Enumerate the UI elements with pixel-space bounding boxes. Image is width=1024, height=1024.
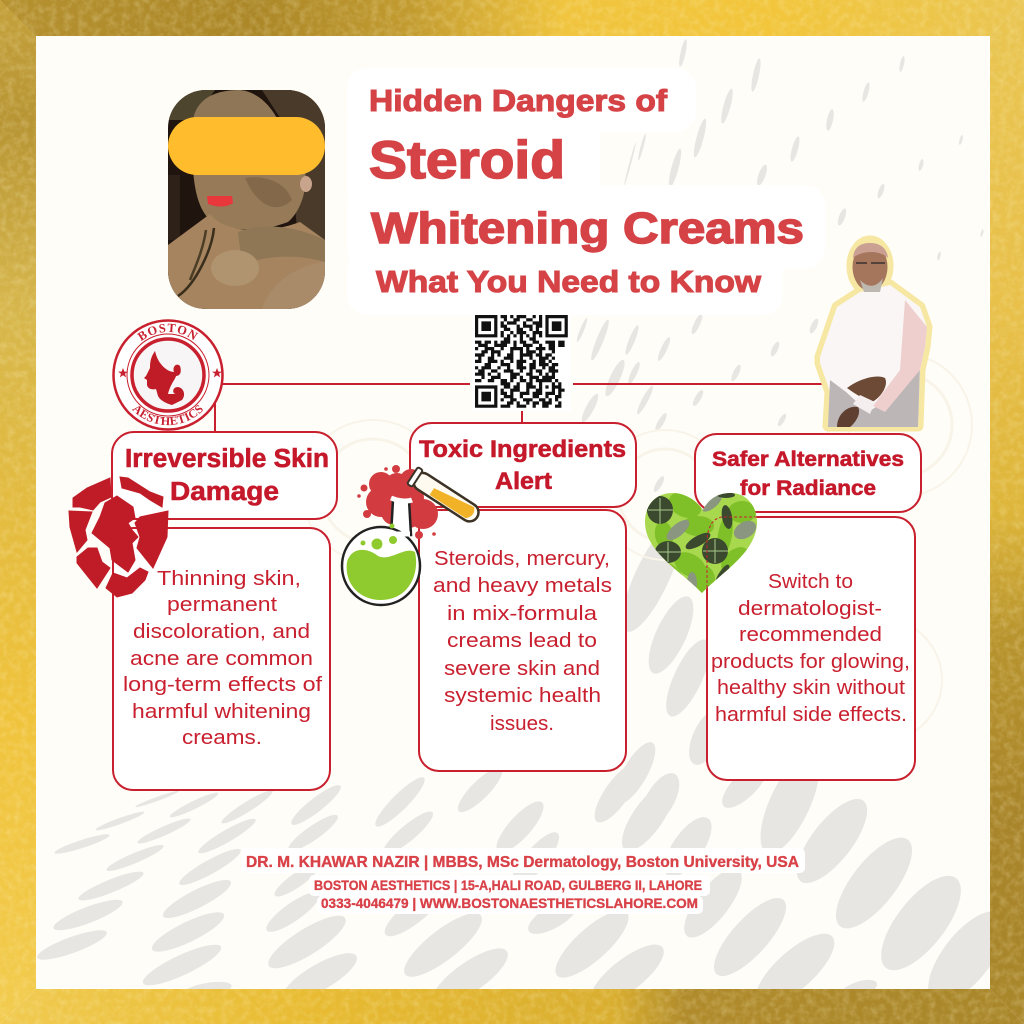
title: Steroid (369, 131, 565, 190)
bubbles (360, 524, 397, 550)
heading text: Safer Alternatives (712, 448, 904, 471)
footer contact details: BOSTON AESTHETICS | 15-A,HALI ROAD, GULBERG II, LAHORE (314, 878, 702, 893)
doctor head (852, 243, 888, 291)
pink sleeve (873, 300, 927, 412)
lower kurta shading (828, 365, 920, 427)
body text: harmful whitening (132, 700, 311, 723)
body text: healthy skin without (717, 676, 905, 699)
QR code (472, 312, 571, 411)
heading text: Alert (495, 468, 552, 495)
logo bottom text: AESTHETICS (132, 404, 203, 426)
body text: harmful side effects. (715, 703, 907, 726)
heading box (695, 434, 921, 512)
flask glass (342, 500, 420, 605)
doctor cut-out portrait (820, 241, 927, 427)
logo stars (118, 368, 222, 377)
heading text: Toxic Ingredients (419, 436, 626, 463)
heading text (125, 445, 329, 506)
title (369, 83, 804, 299)
logo top text: BOSTON (136, 324, 198, 342)
body text: in mix-formula (447, 602, 598, 625)
icon: broken shield (69, 477, 168, 597)
doctor halo (820, 241, 927, 426)
body box (707, 517, 915, 780)
body text: acne are common (130, 647, 313, 670)
heading box (410, 423, 636, 507)
yellow eye bar (168, 117, 325, 175)
title: Whitening Creams (371, 204, 804, 253)
body box (419, 510, 626, 771)
heading text: Irreversible Skin (125, 445, 329, 473)
connector lines (215, 384, 829, 433)
footer contact details: 0333-4046479 | WWW.BOSTONAESTHETICSLAHORE.COM (321, 896, 698, 911)
logo: Boston Aesthetics (112, 319, 224, 431)
body text: long-term effects of (123, 673, 322, 696)
panel: safer alternatives (695, 434, 921, 780)
flask rim (391, 498, 412, 501)
heading text (712, 448, 904, 500)
heading box (112, 432, 337, 519)
panel: toxic ingredients alert (410, 423, 636, 771)
body box (113, 528, 330, 790)
body text (433, 547, 612, 735)
body text: permanent (167, 593, 277, 616)
icon: leafy heart (645, 487, 759, 594)
footer contact details: DR. M. KHAWAR NAZIR | MBBS, MSc Dermatology, Boston University, USA (246, 854, 799, 871)
before photo with yellow eye bar (168, 90, 325, 309)
heading text (419, 436, 626, 495)
heading text: for Radiance (740, 477, 876, 500)
doctor kurta (820, 285, 927, 427)
body text: Thinning skin, (157, 567, 301, 590)
green liquid (347, 550, 416, 600)
body text: dermatologist- (738, 597, 882, 620)
body text: products for glowing, (711, 650, 910, 673)
body text: creams lead to (447, 629, 597, 652)
body text (123, 567, 322, 749)
title backing shape (347, 68, 825, 315)
heading text: Damage (170, 478, 279, 506)
body text: issues. (490, 712, 554, 735)
title: Hidden Dangers of (369, 83, 668, 118)
body text (711, 570, 910, 726)
body text: Switch to (768, 570, 853, 593)
test tube (407, 467, 483, 526)
icon: chemistry flask and test tube (342, 465, 483, 605)
body text: discoloration, and (133, 620, 310, 643)
folded hands (847, 376, 886, 402)
title: What You Need to Know (376, 264, 762, 299)
glasses (856, 262, 885, 264)
body text: systemic health (444, 684, 601, 707)
logo face silhouette (144, 351, 184, 405)
body text: Steroids, mercury, (434, 547, 610, 570)
body text: creams. (182, 726, 262, 749)
body text: recommended (739, 623, 882, 646)
panel: irreversible skin damage (112, 432, 337, 790)
red smoke cloud (357, 465, 438, 539)
footer backing (241, 848, 805, 914)
beard (860, 278, 883, 292)
footer contact details (241, 848, 805, 914)
body text: severe skin and (444, 657, 600, 680)
body text: and heavy metals (433, 574, 612, 597)
faint stamp watermarks (302, 353, 972, 742)
